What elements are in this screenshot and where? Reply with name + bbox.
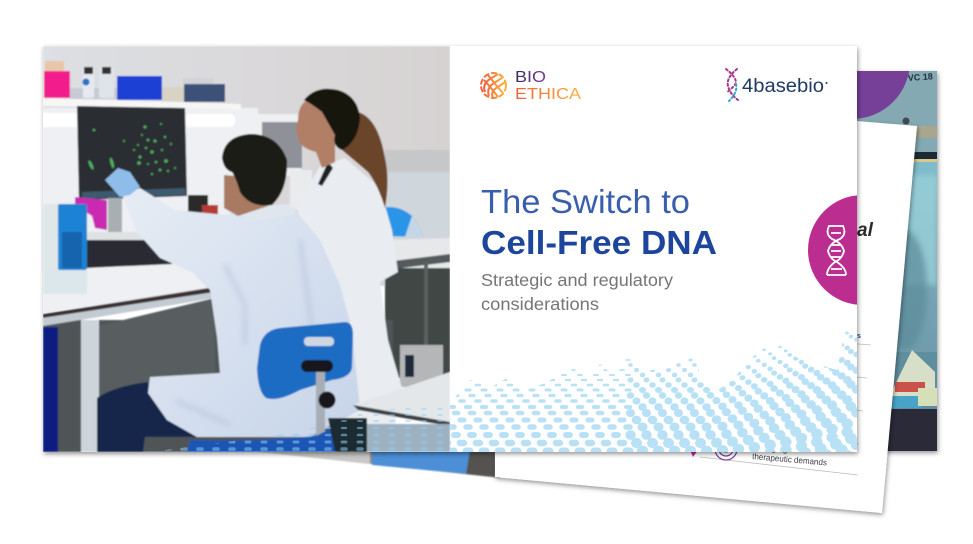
face xyxy=(296,98,335,168)
area behind the man xyxy=(98,298,215,400)
navy panel xyxy=(43,327,58,452)
text: page caption: therapeutic demands xyxy=(752,451,827,468)
machine under bench xyxy=(400,345,443,387)
shelf items xyxy=(44,61,225,102)
text: page heading fragment: al xyxy=(857,220,874,241)
text: back photo label: VC 18 xyxy=(907,71,933,83)
man: glove xyxy=(105,168,140,197)
text: page caption xyxy=(752,441,827,468)
blue machine xyxy=(43,204,59,272)
background monitor xyxy=(258,114,302,176)
man: jeans xyxy=(97,382,197,452)
logo: 4basebio xyxy=(726,69,828,101)
logo: Bio Ethica xyxy=(481,69,582,103)
dots fading over photograph xyxy=(150,409,450,449)
woman xyxy=(296,89,402,425)
desk dark PC xyxy=(86,239,172,269)
dark area by foreground bench xyxy=(328,418,367,452)
icon: purple circle xyxy=(857,71,910,119)
left desk top xyxy=(43,262,215,313)
panel: lab photograph xyxy=(43,46,450,452)
table rows xyxy=(700,343,871,475)
woman's coat xyxy=(298,158,402,425)
white page xyxy=(495,120,917,513)
right bench xyxy=(394,238,450,269)
text: 4basebio: 4basebio xyxy=(742,76,824,97)
icon: Bio Ethica knot xyxy=(481,73,506,98)
dot-wave pattern xyxy=(450,332,857,452)
wall xyxy=(43,46,450,286)
man: neck and head xyxy=(222,134,287,216)
text: BIO: BIO xyxy=(515,69,546,86)
photo strip of middle sheet xyxy=(243,450,500,478)
lower wall items xyxy=(75,197,107,230)
panel: title area xyxy=(450,46,857,452)
text: title line one: The Switch to xyxy=(481,183,690,220)
under left desk xyxy=(43,320,393,452)
back sheet: photo page xyxy=(857,70,941,456)
subtitle: Strategic and regulatory xyxy=(481,270,673,290)
man's collar xyxy=(240,204,296,222)
icon: purple rings xyxy=(715,438,737,460)
desk leg xyxy=(81,320,99,452)
text: blue label fragment: s xyxy=(857,333,861,340)
shelf xyxy=(43,98,241,109)
monitor bottom strip xyxy=(82,188,186,199)
icon: helix xyxy=(726,69,738,101)
microscopy dots xyxy=(87,123,176,175)
monitor xyxy=(77,106,187,200)
icon: magenta pointer xyxy=(690,450,698,457)
text: ETHICA: ETHICA xyxy=(515,86,582,103)
foreground bench xyxy=(353,372,450,422)
middle sheet: rotated page xyxy=(243,120,917,513)
ponytail xyxy=(342,112,388,208)
card shadow base xyxy=(43,46,857,452)
man: coat xyxy=(122,188,360,437)
text: registered mark xyxy=(826,82,828,84)
chair xyxy=(187,322,353,452)
right wall and machines xyxy=(385,150,450,172)
front cover card xyxy=(41,45,861,457)
under-shelf lights xyxy=(43,113,78,127)
icon: magenta DNA badge xyxy=(808,195,918,305)
subtitle: considerations xyxy=(481,294,599,314)
hair xyxy=(304,89,360,150)
text: page caption: emerging xyxy=(752,441,788,454)
title xyxy=(481,183,717,262)
subtitle xyxy=(481,270,673,314)
text: title line two: Cell-Free DNA xyxy=(481,225,717,262)
